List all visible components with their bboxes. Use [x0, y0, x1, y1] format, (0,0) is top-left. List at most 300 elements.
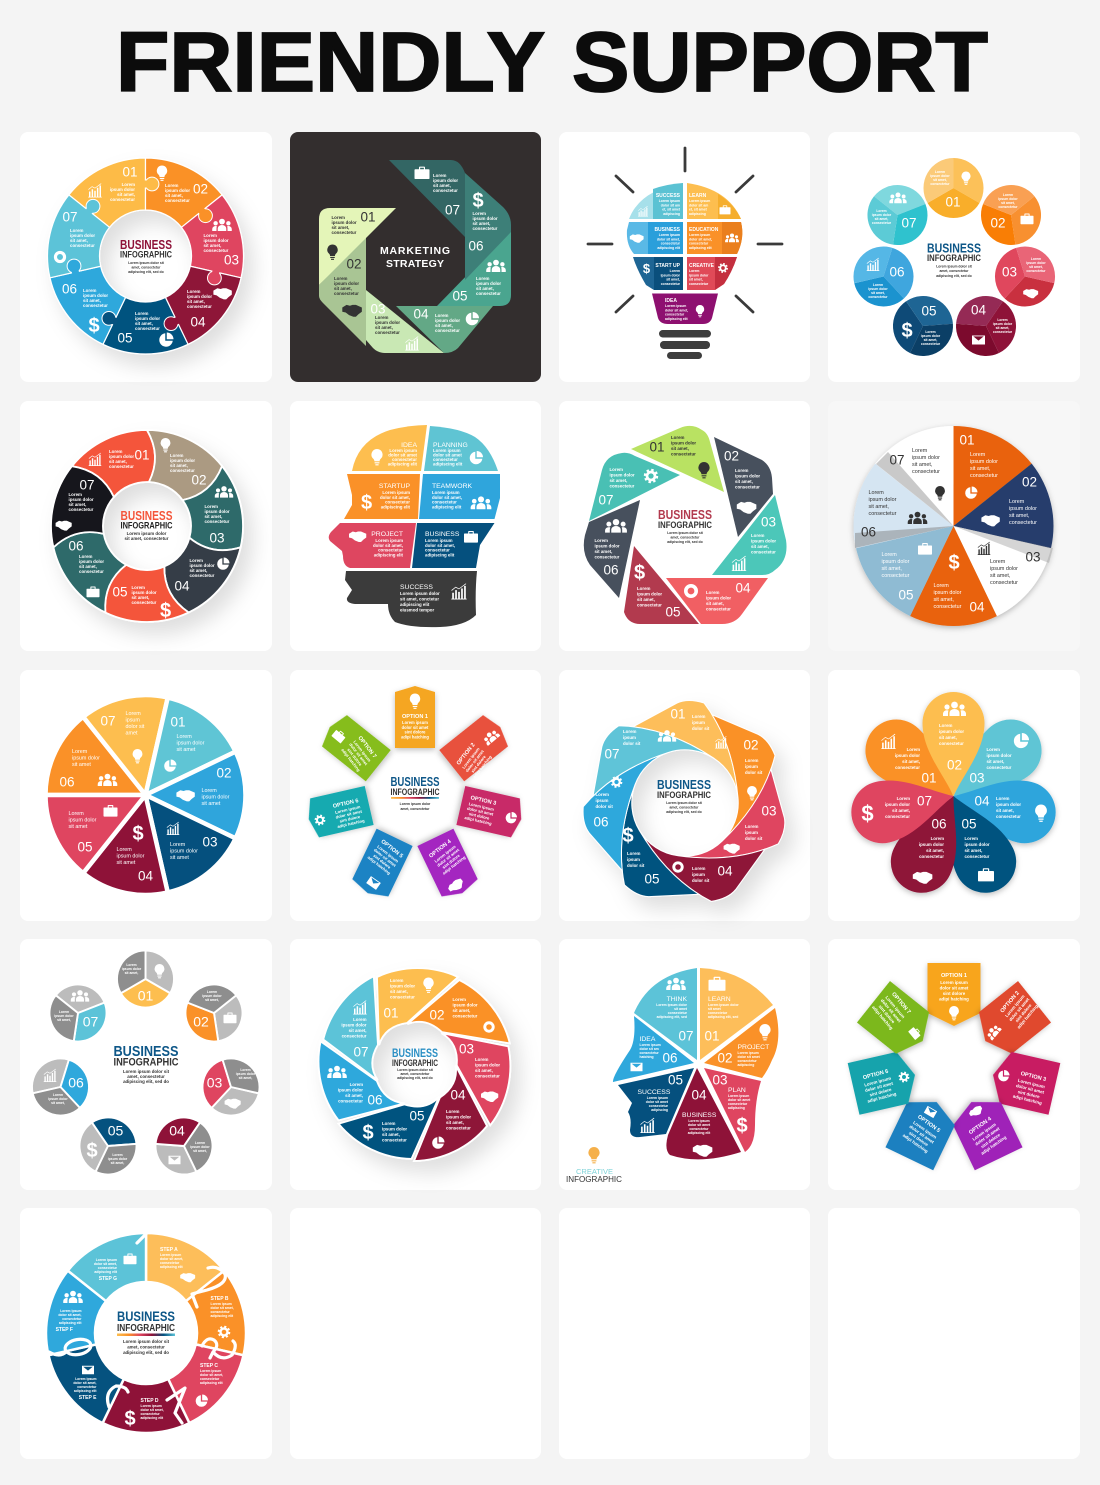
step G: dolor sit amet,: [94, 1262, 117, 1266]
quadrant: creative: sit amet,: [689, 278, 703, 282]
option 2: OPTION 2: [456, 742, 477, 767]
segment 03 labels: 03: [459, 1042, 474, 1057]
circle 02: sit amet,: [1001, 201, 1015, 205]
band 05 labels: ipsum: [627, 857, 640, 862]
petal 06 labels: sit amet,: [926, 848, 944, 853]
segment 01 labels: Lorem: [122, 182, 135, 187]
ring segments: [33, 135, 270, 378]
petal 03 labels: ipsum dolor: [986, 753, 1012, 758]
circle 05: 05: [921, 304, 937, 319]
circle 03: Lorem: [1031, 257, 1041, 261]
circle 02: sit amet,: [205, 998, 219, 1002]
slice 04 labels: consectetur: [934, 604, 962, 610]
option 5: adipi hatching: [367, 855, 392, 876]
step B: [210, 1296, 234, 1337]
slice 03 labels: Lorem: [990, 559, 1005, 565]
slice 01 learn: sit amet: [708, 1007, 722, 1011]
segment 04 labels: ipsum dolor: [187, 294, 212, 299]
slice 07 labels: amet: [126, 730, 138, 736]
startup: $: [361, 492, 372, 514]
segment 07 labels: sit amet,: [349, 1028, 366, 1033]
option 4: dolor sit amet: [974, 1126, 1001, 1147]
slice 05 success: dolor sit amet: [646, 1100, 669, 1104]
step A: consectetur: [160, 1261, 180, 1265]
center title: Lorem ipsum dolor: [400, 802, 430, 806]
segment 03 labels: 03: [209, 531, 225, 546]
slice 07 think: Lorem ipsum dolor: [656, 1003, 687, 1007]
step G: adipiscing elit: [94, 1270, 118, 1274]
option 2: dolor sit amet: [1008, 997, 1031, 1022]
slice 02 labels: 02: [1022, 475, 1037, 490]
panel: shutter heptagon: [559, 401, 810, 651]
segment 03: 03: [761, 515, 776, 530]
petal 02 labels: [939, 702, 966, 773]
panel: shutter wheel: [290, 939, 541, 1190]
step D: STEP D: [140, 1398, 159, 1404]
petal 07 labels: $: [861, 801, 874, 826]
business: Lorem ipsum: [425, 538, 453, 543]
step F: dolor sit amet,: [58, 1313, 82, 1317]
planning: adipiscing elit: [433, 462, 463, 466]
center title: Lorem ipsum dolor sit: [397, 1068, 433, 1072]
segment 03 labels: Lorem: [475, 1057, 488, 1062]
step F: [56, 1291, 83, 1333]
segment 07 labels: 07: [62, 210, 78, 225]
segment 01 labels: consectetur: [109, 464, 134, 469]
segment 02 labels: Lorem: [170, 453, 183, 458]
circle 02: Lorem: [207, 990, 217, 994]
quadrant: education: dolor sit amet,: [689, 237, 712, 241]
option 7: sint dolore: [346, 747, 363, 767]
quadrant: education: consectetur: [689, 242, 709, 246]
slice 04 labels: ipsum dolor: [116, 854, 145, 860]
petal 01 labels: consectetur: [895, 765, 920, 770]
option 4: OPTION 4: [428, 838, 453, 860]
segment 02 labels: [429, 997, 493, 1031]
option 1: [395, 686, 435, 748]
business: BUSINESS: [425, 531, 460, 538]
circle 06: ipsum dolor: [48, 1097, 68, 1101]
panel: grey circles: [20, 939, 272, 1190]
success: eiusmod tempor: [400, 608, 434, 612]
slice 02 project: adipiscing: [738, 1063, 754, 1067]
circle 04: 04: [971, 303, 986, 318]
option 2: adipi hatching: [472, 754, 493, 779]
business: consectetur: [425, 548, 450, 553]
circle 04: [152, 1115, 224, 1184]
option 6: dolor sit amet: [335, 809, 363, 820]
petal 03 labels: sit amet,: [986, 759, 1004, 764]
center title: adipiscing elit, sed do: [936, 274, 972, 278]
teamwork: [419, 474, 500, 519]
quadrant: creative: [687, 257, 737, 290]
step F: consectetur: [62, 1317, 82, 1321]
segment 05: [437, 230, 511, 306]
segment 01: sit amet,: [332, 225, 349, 230]
segment 01: ipsum dolor: [332, 220, 357, 225]
step A: dolor sit amet,: [160, 1257, 183, 1261]
light rays: [588, 148, 782, 312]
petal 07 labels: sit amet,: [892, 808, 910, 813]
segment 05 labels: ipsum dolor: [135, 316, 160, 321]
option 3: dolor sit amet: [1015, 1083, 1045, 1095]
center title: amet, consectetur: [400, 807, 430, 811]
circle 07: [46, 973, 115, 1045]
option 5: Lorem ipsum: [376, 844, 400, 864]
center title: BUSINESS: [120, 237, 172, 252]
circle 05: sit amet,: [924, 338, 937, 342]
band 02 labels: ipsum: [745, 764, 758, 769]
circle 05: ipsum dolor: [921, 334, 941, 338]
center title: Lorem ipsum dolor sit: [667, 531, 703, 535]
project: Lorem ipsum: [375, 538, 403, 543]
circle 04: 04: [169, 1123, 185, 1139]
circle 03: [191, 1051, 262, 1121]
petal 07 labels: ipsum dolor: [885, 802, 910, 807]
step E: Lorem ipsum: [75, 1377, 96, 1381]
segment 06: $: [472, 190, 484, 212]
segment 07: [589, 453, 680, 521]
step C: [196, 1363, 223, 1407]
segment 02 labels: sit amet,: [452, 1008, 470, 1013]
teamwork: TEAMWORK: [432, 483, 472, 490]
petal 04 labels: 04: [974, 794, 990, 809]
segment 03: Lorem: [751, 533, 764, 538]
slice 05 success: consectetur: [649, 1104, 669, 1108]
segment 05 labels: consectetur: [135, 326, 160, 331]
petal 05 labels: sit amet,: [964, 848, 982, 853]
slice 03 plan: $: [736, 1115, 748, 1137]
segment 06 labels: sit amet,: [79, 564, 97, 569]
segment 06 labels: [327, 1066, 383, 1108]
circle 06: Lorem: [53, 1093, 63, 1097]
segment 03 labels: 03: [224, 253, 239, 268]
business: [412, 523, 494, 568]
band 05 labels: Lorem: [627, 851, 640, 856]
center title: [380, 245, 450, 270]
center title: [658, 507, 712, 544]
slice 05 labels: ipsum dolor: [68, 818, 97, 824]
panel: inward option tags: [828, 939, 1080, 1190]
option 2: sint dolore: [1014, 1002, 1033, 1023]
step F: adipiscing elit: [59, 1321, 82, 1325]
segment 03 labels: consectetur: [204, 248, 229, 253]
option 7: [857, 981, 939, 1062]
quadrant: learn: adipiscing: [689, 212, 706, 216]
option 2: sint dolore: [470, 754, 487, 774]
band 02 labels: Lorem: [745, 758, 758, 763]
segment 07: Lorem: [610, 467, 623, 472]
slice 01 learn: LEARN: [708, 996, 731, 1003]
slice 05 success: SUCCESS: [638, 1089, 671, 1096]
center title: amet, consectetur: [669, 806, 699, 810]
circle 07: [863, 173, 936, 248]
petal 03 labels: 03: [969, 771, 985, 786]
segment 06 labels: sit amet,: [345, 1093, 363, 1098]
planning: [424, 426, 498, 471]
slice 01 learn: consectetur: [708, 1011, 728, 1015]
slice 05 success: adipiscing: [651, 1108, 668, 1112]
step B: Lorem ipsum: [210, 1302, 232, 1306]
segment 04: Lorem: [435, 313, 448, 318]
option 3: [456, 786, 526, 839]
segment 06: sit amet,: [594, 549, 612, 554]
circle 04: [952, 294, 1028, 366]
slice 01 labels: sit amet: [176, 747, 196, 753]
segment 07: consectetur: [433, 188, 458, 193]
petal 07 labels: [861, 794, 932, 826]
quadrant: start up: consectetur: [661, 282, 681, 286]
step C: consectetur: [200, 1377, 220, 1381]
option 3: [987, 1049, 1060, 1115]
band 06 labels: dolor sit: [596, 804, 613, 809]
circle 06: ipsum dolor: [868, 287, 888, 291]
segment 04: 04: [413, 307, 429, 322]
band 06 labels: 06: [593, 815, 609, 830]
center title: Lorem ipsum dolor sit: [666, 801, 702, 805]
circle 06: Lorem: [873, 283, 883, 287]
segment 06: [584, 500, 640, 598]
segment 02: 02: [724, 449, 739, 464]
quadrant: business: dolor sit amet,: [657, 237, 680, 241]
circle 01: ipsum dolor: [122, 967, 142, 971]
segment 02 labels: 02: [429, 1008, 445, 1023]
petal 04 labels: [974, 794, 1047, 822]
quadrant: learn: et, sit amet: [689, 208, 708, 212]
slice 04 business: 04: [691, 1088, 707, 1103]
petal 07 labels: consectetur: [885, 814, 910, 819]
circle 01: ipsum dolor: [930, 174, 950, 178]
quadrant: creative: consectetur: [689, 282, 709, 286]
bulb base: idea: dolor sit amet,: [665, 308, 688, 312]
circle 04: Lorem: [195, 1141, 205, 1145]
segment 02 labels: [157, 166, 208, 203]
petal 04 labels: sit amet,: [996, 808, 1014, 813]
band 03 labels: dolor sit: [745, 836, 763, 841]
petal 05 labels: Lorem: [964, 836, 978, 841]
band 06 labels: ipsum: [596, 798, 609, 803]
quadrant: start up: START UP: [655, 263, 681, 269]
band 04 labels: ipsum: [692, 872, 705, 877]
step E: adipiscing elit: [74, 1389, 97, 1393]
option 7: OPTION 7: [890, 991, 911, 1015]
idea: [352, 425, 427, 471]
segment 06 labels: Lorem: [83, 288, 96, 293]
circle 05: ipsum dolor: [108, 1157, 128, 1161]
segment 04: consectetur: [435, 328, 460, 333]
circle 01: consectetur: [930, 182, 950, 186]
slice 03 labels: sit amet: [170, 855, 189, 861]
segment 04 labels: sit amet,: [446, 1120, 464, 1125]
segment 03 labels: ipsum dolor: [204, 509, 230, 514]
slice 03 labels: [167, 822, 218, 861]
center title: [392, 1048, 438, 1080]
slice 06 labels: [59, 749, 117, 790]
step D: adipiscing elit: [140, 1416, 164, 1420]
step B: consectetur: [210, 1310, 230, 1314]
slice 07 labels: ipsum dolor: [912, 455, 940, 461]
segment 04 labels: sit amet,: [190, 568, 207, 573]
option 7: adipi hatching: [340, 747, 362, 773]
empty card row 5 column 3: [559, 1208, 810, 1459]
center title: STRATEGY: [386, 258, 444, 270]
circle 03: sit amet,: [1029, 265, 1043, 269]
slice 05 labels: [68, 805, 118, 855]
slice 05 success: [618, 1068, 694, 1137]
circle 01: sit amet,: [125, 971, 138, 975]
slice 03 plan: [704, 1068, 761, 1152]
circle 01: 01: [138, 988, 153, 1004]
slice 07 labels: [889, 448, 945, 500]
segment 04 labels: Lorem: [446, 1109, 459, 1114]
petal 05 labels: ipsum dolor: [964, 842, 990, 847]
option 1: adipi hatching: [401, 734, 429, 739]
slice 07 labels: 07: [100, 714, 116, 729]
segment 01: consectetur: [671, 452, 696, 456]
circle 06: sit amet,: [871, 291, 885, 295]
petal 06 labels: [913, 817, 947, 884]
petal 06 labels: 06: [931, 817, 947, 832]
quadrant: start up: Lorem: [670, 269, 680, 273]
segment 02: consectetur: [735, 484, 760, 490]
option 1: OPTION 1: [941, 973, 967, 979]
segment 02: [714, 437, 773, 537]
segment 04 labels: Lorem: [187, 289, 200, 294]
circle 01: [107, 947, 174, 1018]
segment 02: sit amet,: [334, 286, 352, 291]
panel: puzzle ring infographic: [20, 132, 272, 382]
segment 04: 04: [735, 581, 751, 596]
circle 05: [70, 1106, 140, 1176]
option 5: OPTION 5: [379, 839, 404, 860]
idea: IDEA: [401, 442, 417, 449]
segment 01: ipsum dolor: [671, 440, 696, 446]
option 3: OPTION 3: [470, 795, 497, 807]
idea: dolor sit amet: [388, 452, 418, 458]
center title: adipiscing elit, sed do: [666, 810, 702, 814]
slice 04 labels: ipsum dolor: [934, 590, 962, 596]
segment 05: consectetur: [637, 602, 662, 608]
band 07 labels: 07: [604, 747, 620, 762]
panel: option tags: [290, 670, 541, 921]
quadrant: success: [629, 183, 683, 219]
petal 04 labels: Lorem: [996, 796, 1009, 801]
step G: STEP G: [99, 1276, 117, 1282]
slice 07 labels: Lorem: [912, 448, 927, 454]
panel: head with quadrants: [290, 401, 541, 651]
segment 05: [624, 546, 699, 624]
business: dolor sit amet,: [425, 543, 455, 548]
center title: Lorem ipsum dolor sit: [936, 264, 972, 268]
circle 01: 01: [945, 195, 961, 210]
segment 04: sit amet,: [706, 601, 724, 606]
segment 06: sit amet,: [472, 221, 490, 226]
segment 03: sit amet,: [375, 325, 393, 330]
center title: [120, 508, 173, 541]
circle 06: consectetur: [868, 295, 888, 299]
segment 01 labels: 01: [383, 1006, 399, 1021]
option 1: dolor sit amet: [402, 725, 429, 730]
center title: MARKETING: [380, 245, 450, 257]
panel: marketing strategy: [290, 132, 541, 382]
center title: INFOGRAPHIC: [657, 790, 711, 801]
slice 07 think: sit amet: [674, 1007, 688, 1011]
band 01 labels: dolor sit: [692, 726, 710, 731]
band 05 labels: $: [622, 825, 634, 847]
slice 07 labels: 07: [889, 453, 905, 468]
option 4: adipi hatching: [980, 1135, 1007, 1156]
segment 03 labels: [204, 486, 233, 546]
option 4: dolor sit amet: [436, 847, 461, 868]
segment 02 labels: sit amet,: [165, 193, 183, 198]
step E: dolor sit amet,: [73, 1381, 97, 1385]
slice 06 idea: [613, 1016, 694, 1082]
segment 02: consectetur: [334, 291, 359, 296]
petal 01 labels: [881, 734, 937, 786]
segment 02: Lorem: [334, 276, 347, 281]
segment 06 labels: [68, 539, 104, 597]
segment 04 labels: 04: [450, 1088, 466, 1103]
circle 06: [848, 244, 921, 319]
slice 04 labels: 04: [138, 869, 153, 884]
step B: STEP B: [210, 1296, 229, 1302]
slice 02 labels: sit amet: [202, 801, 221, 807]
slice 04 business: [666, 1068, 741, 1159]
option 2: dolor sit amet: [464, 748, 485, 773]
slice 07 think: adipiscing elit, sed: [657, 1015, 687, 1019]
center title: amet, consectetur: [131, 266, 161, 270]
center title: Lorem ipsum dolor: [127, 531, 166, 536]
slice 07 think: [634, 968, 697, 1060]
segment 05: ipsum dolor: [476, 281, 501, 286]
center title: adipiscing elit, sed do: [128, 270, 164, 274]
panel: curved ring: [20, 401, 272, 651]
slice 03 plan: 03: [712, 1073, 728, 1088]
step C: dolor sit amet,: [200, 1373, 223, 1377]
center title: [120, 237, 172, 274]
quadrant: education: EDUCATION: [689, 227, 719, 233]
segment 06: Lorem: [472, 211, 486, 216]
slice 01 labels: ipsum dolor: [970, 459, 998, 465]
circle 07: consectetur: [872, 221, 892, 225]
segment 05 labels: [362, 1109, 425, 1144]
band 04 labels: 04: [717, 864, 733, 879]
slice 01 labels: consectetur: [970, 473, 998, 479]
slice 02 project: dolor sit amet: [738, 1055, 761, 1059]
segment 05 labels: 05: [112, 585, 128, 600]
success: SUCCESS: [400, 584, 433, 591]
segment 04 labels: [432, 1088, 471, 1149]
circle 07: 07: [83, 1014, 98, 1030]
segment 06: [465, 173, 511, 280]
segment 04 labels: consectetur: [446, 1126, 471, 1130]
segment 06 labels: ipsum dolor: [338, 1088, 363, 1092]
slice 04 labels: [116, 823, 153, 884]
petal 02 labels: ipsum dolor: [939, 729, 964, 734]
slice 01 learn: Lorem ipsum dolor: [708, 1003, 739, 1007]
center title: INFOGRAPHIC: [114, 1056, 179, 1068]
option 5: [350, 829, 413, 902]
segment 07 labels: consectetur: [342, 1034, 367, 1038]
empty card row 5 column 4: [828, 1208, 1080, 1459]
option 5: adipi hatching: [902, 1133, 929, 1154]
slice 06 idea: hatching: [640, 1055, 654, 1059]
center title: Lorem ipsum dolor sit: [123, 1069, 169, 1074]
center title: INFOGRAPHIC: [927, 253, 981, 264]
segment 06 labels: consectetur: [338, 1098, 363, 1104]
circle 07: ipsum dolor: [872, 213, 892, 217]
segment 04: consectetur: [706, 606, 731, 612]
